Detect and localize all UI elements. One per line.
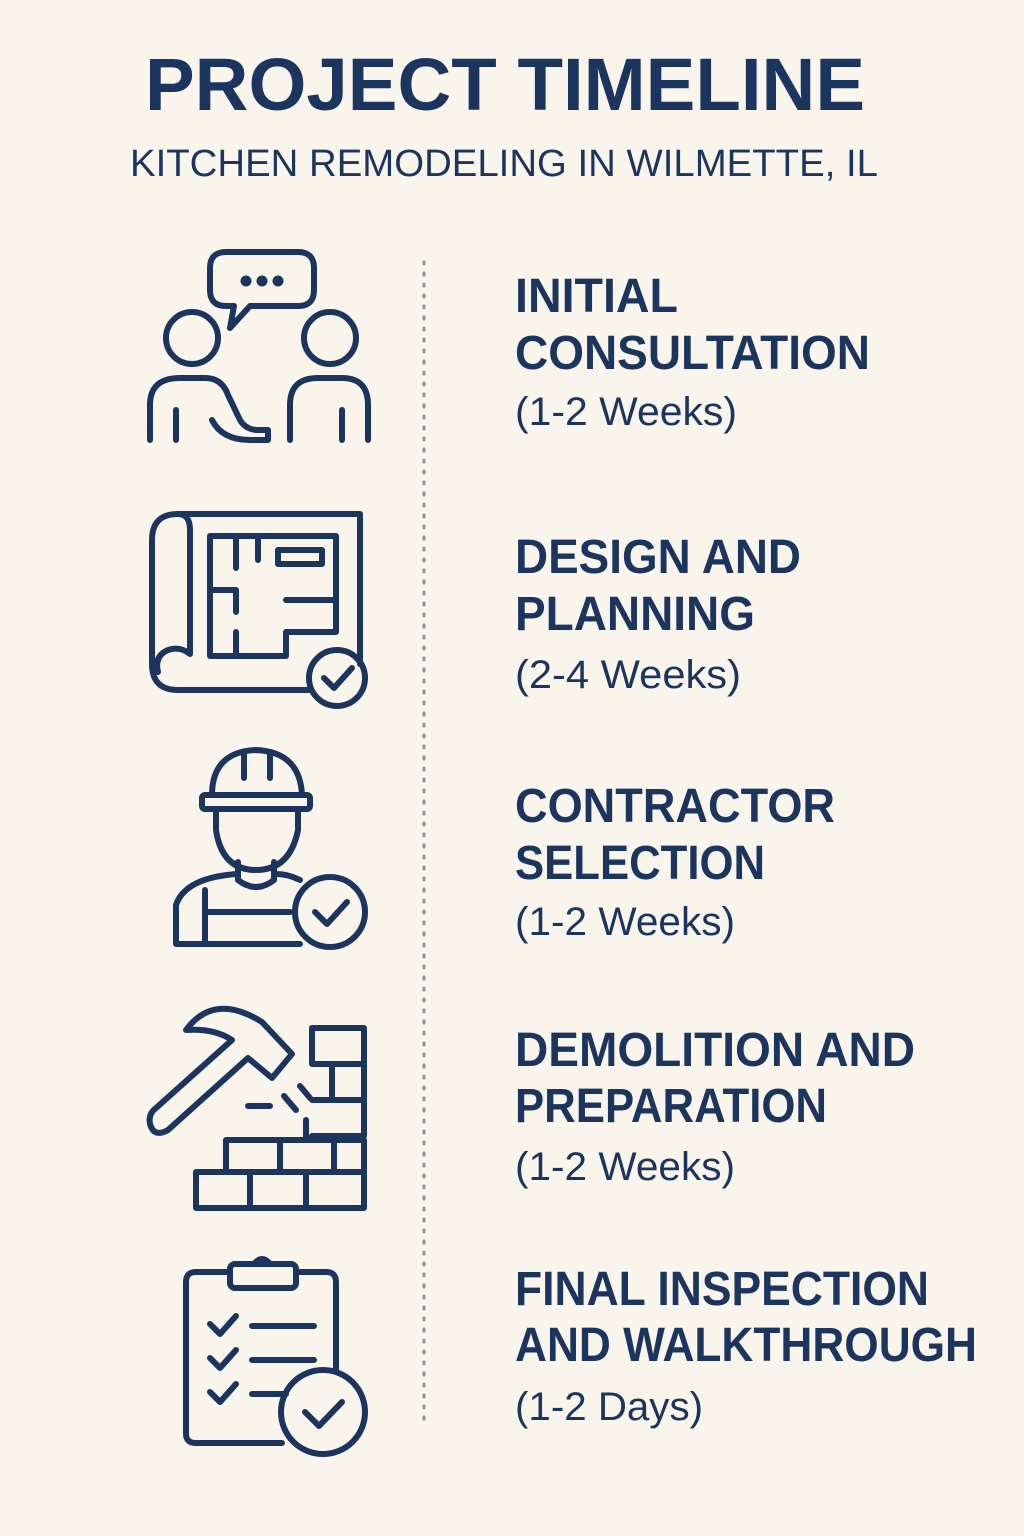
step 5 text	[515, 1263, 977, 1429]
step 2 text	[515, 531, 801, 697]
step 1 text: (1-2 Weeks)	[515, 390, 737, 434]
icon: demolition	[150, 1009, 364, 1208]
subtitle: KITCHEN REMODELING IN WILMETTE, IL	[130, 143, 878, 185]
step 4 text: DEMOLITION AND	[515, 1024, 915, 1077]
step 3 text: SELECTION	[515, 837, 765, 890]
step 3 text	[515, 780, 835, 944]
step 2 text: DESIGN AND	[515, 531, 801, 584]
step 2 text: PLANNING	[515, 588, 755, 641]
step 5 text: (1-2 Days)	[515, 1385, 703, 1429]
step 4 text: PREPARATION	[515, 1080, 827, 1133]
step 3 text: (1-2 Weeks)	[515, 900, 735, 944]
icon: checklist	[186, 1259, 365, 1454]
step 4 text	[515, 1024, 915, 1189]
icon: blueprint	[152, 514, 365, 706]
title: PROJECT TIMELINE	[145, 43, 865, 126]
step 1 text	[515, 270, 870, 434]
icon: consultation	[150, 252, 368, 440]
step 5 text: AND WALKTHROUGH	[515, 1319, 977, 1372]
step 3 text: CONTRACTOR	[515, 780, 835, 833]
step 1 text: CONSULTATION	[515, 327, 870, 380]
step 5 text: FINAL INSPECTION	[515, 1263, 929, 1316]
step 2 text: (2-4 Weeks)	[515, 653, 741, 697]
icon: worker	[176, 750, 365, 947]
step 4 text: (1-2 Weeks)	[515, 1145, 735, 1189]
step 1 text: INITIAL	[515, 270, 678, 323]
